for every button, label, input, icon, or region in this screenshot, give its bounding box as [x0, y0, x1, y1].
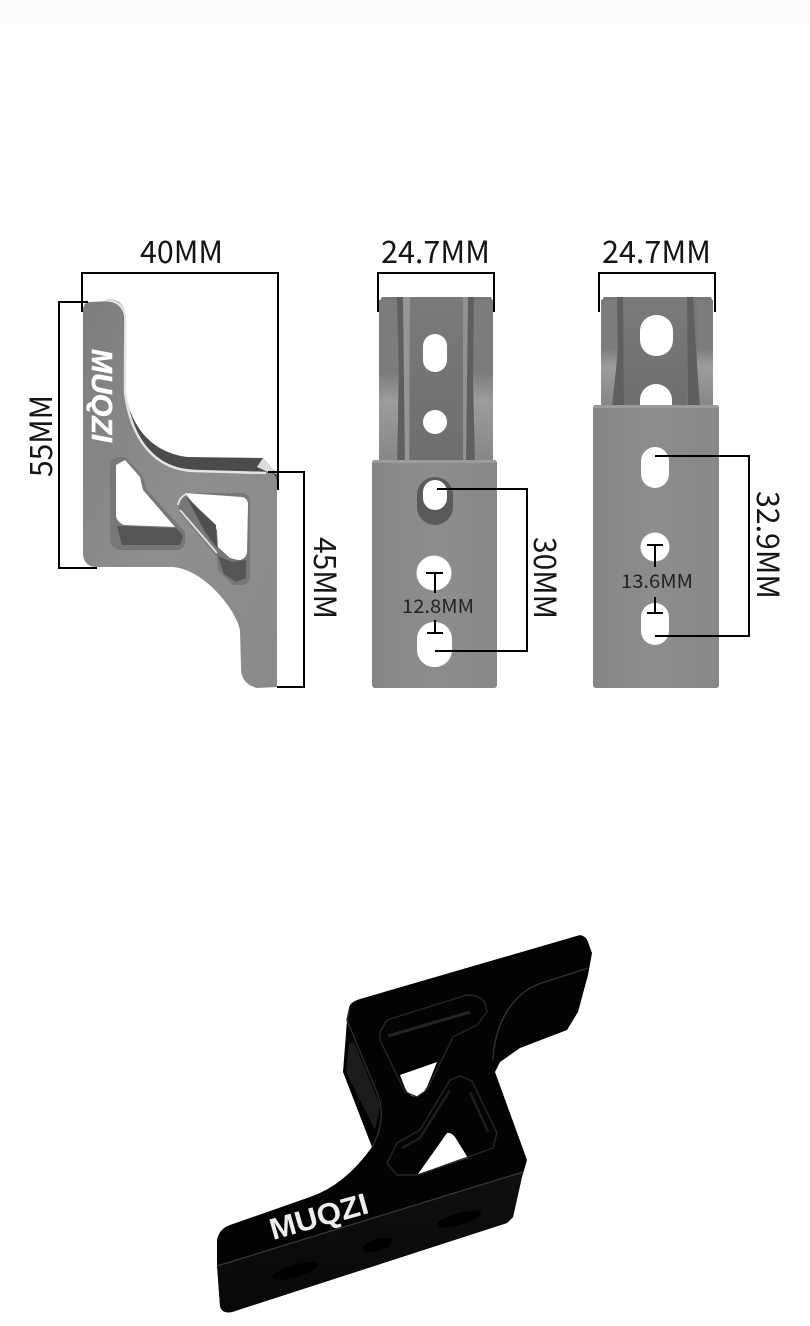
lower plate slot — [417, 622, 452, 667]
dimension label: 13.6MM: 13.6MM — [621, 567, 693, 594]
top band — [0, 0, 810, 25]
rear arm highlight — [493, 968, 588, 1060]
lower plate slot — [641, 603, 669, 645]
dimension lines — [59, 273, 749, 687]
plate hole — [640, 532, 670, 562]
upper plate slot — [641, 447, 669, 488]
right cut-out — [178, 493, 250, 585]
black bracket product photo — [217, 935, 592, 1312]
left tube edge — [347, 1006, 381, 1147]
left cut-out — [110, 457, 185, 550]
side view bracket — [83, 299, 277, 688]
lower pocket — [387, 1076, 497, 1175]
upper plate slot — [423, 480, 447, 510]
dimension label: 55MM: 55MM — [16, 395, 61, 477]
dimension label: 24.7MM left: 24.7MM — [381, 227, 490, 272]
dimension label: 12.8MM: 12.8MM — [402, 592, 474, 619]
plate hole — [416, 556, 452, 590]
side face — [217, 1172, 523, 1312]
arm hole — [423, 410, 447, 434]
side hole middle — [361, 1235, 393, 1255]
front view bracket 1 — [372, 297, 497, 688]
logo: MUQZI: MUQZI — [85, 349, 117, 443]
side hole right — [435, 1207, 483, 1231]
arm slot — [423, 334, 447, 372]
dimension label: 45MM: 45MM — [305, 537, 350, 619]
dimension label: 32.9MM: 32.9MM — [748, 491, 793, 599]
front view bracket 2 — [593, 297, 719, 688]
side hole left — [270, 1259, 320, 1283]
dimension label: 40MM: 40MM — [140, 227, 223, 272]
dimension label: 24.7MM right: 24.7MM — [602, 227, 711, 272]
chamfer line — [217, 1172, 523, 1266]
dimension label: 30MM: 30MM — [525, 537, 570, 619]
logo: MUQZI: MUQZI — [266, 1188, 372, 1247]
upper pocket — [380, 995, 487, 1097]
